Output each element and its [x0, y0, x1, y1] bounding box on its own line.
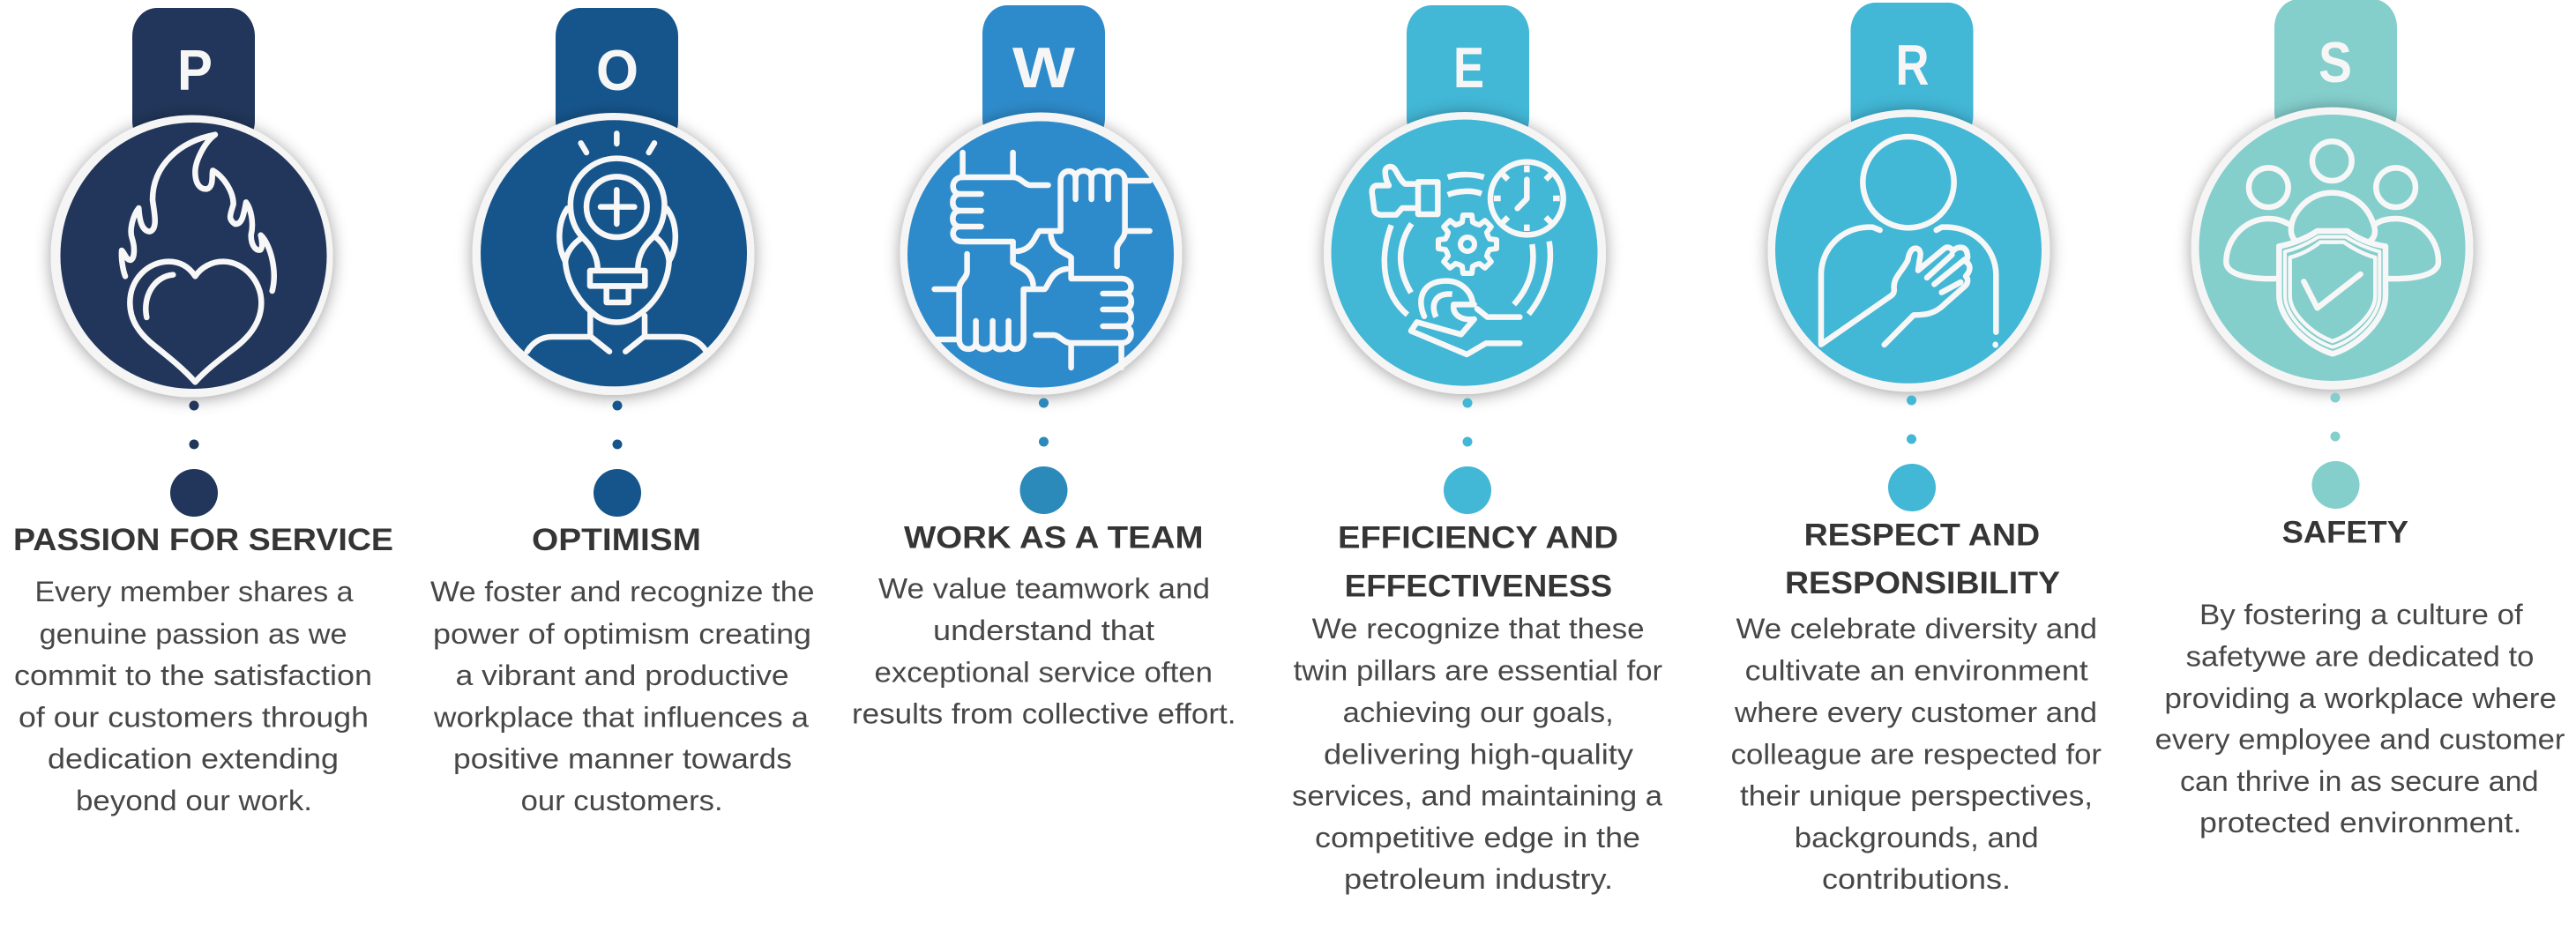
tab: letter O: O — [596, 38, 638, 102]
text: optimism description — [430, 576, 815, 816]
tab: letter R: R — [1896, 33, 1930, 97]
text: respect description: We celebrate diversity and — [1736, 613, 2097, 645]
text: optimism description: a vibrant and productive — [456, 660, 789, 691]
text: optimism description: We foster and recognize the — [430, 576, 815, 607]
icon: person with hand on heart — [1821, 137, 1996, 345]
tab: letter S — [2274, 0, 2397, 140]
badge circle E — [1324, 112, 1606, 394]
heading: optimism: OPTIMISM — [532, 523, 701, 557]
badge circle O — [473, 113, 755, 395]
text: teamwork description: understand that — [933, 615, 1154, 646]
tab: letter E — [1407, 5, 1529, 146]
text: passion description: of our customers through — [19, 702, 369, 734]
text: efficiency description: twin pillars are essential for — [1294, 654, 1662, 686]
icon: gear — [1438, 215, 1497, 273]
text: optimism description: positive manner towards — [453, 742, 792, 774]
heading: passion for service: PASSION FOR SERVICE — [13, 523, 393, 557]
panel: E efficiency and effectiveness — [1292, 5, 1662, 895]
heading: respect and responsibility: RESPECT AND — [1804, 518, 2040, 552]
hand 2 — [1018, 171, 1150, 266]
tab: letter S: S — [2318, 30, 2352, 94]
text: respect description: cultivate an environment — [1745, 654, 2088, 686]
text: efficiency description: competitive edge in the — [1315, 822, 1640, 853]
text: optimism description: our customers. — [521, 785, 723, 816]
text: passion description: commit to the satisfaction — [14, 660, 372, 691]
heading: respect and responsibility — [1785, 518, 2060, 600]
heading: efficiency and effectiveness: EFFECTIVENESS — [1345, 570, 1612, 603]
text: respect description: colleague are respected for — [1731, 739, 2102, 771]
icon: head with light bulb — [527, 133, 706, 352]
connector dots P — [170, 400, 218, 517]
text: safety description — [2155, 599, 2565, 838]
heading: respect and responsibility: RESPONSIBILITY — [1785, 566, 2060, 600]
text: safety description: safetywe are dedicated to — [2186, 640, 2534, 672]
connector dots E — [1444, 399, 1491, 514]
text: passion description: Every member shares a — [35, 576, 354, 607]
panel: R respect and responsibility — [1731, 3, 2102, 895]
text: teamwork description: exceptional service often — [875, 656, 1213, 688]
tab: letter P: P — [177, 38, 213, 102]
text: respect description: contributions. — [1822, 863, 2011, 895]
connector dots R — [1888, 395, 1936, 511]
icon: flaming heart — [122, 135, 274, 382]
panel: O optimism — [430, 8, 815, 816]
text: passion description: beyond our work. — [76, 785, 312, 816]
panel: P passion for service — [13, 8, 393, 816]
hand 3 — [1036, 235, 1131, 368]
tab: letter P — [132, 8, 255, 149]
tab: letter O — [556, 8, 678, 149]
text: efficiency description: services, and maintaining a — [1292, 779, 1662, 811]
heading: efficiency and effectiveness: EFFICIENCY AND — [1338, 520, 1618, 555]
text: passion description — [14, 576, 372, 816]
tab: letter W: W — [1012, 35, 1076, 100]
heading: safety: SAFETY — [2282, 515, 2408, 550]
tab: letter E: E — [1453, 35, 1484, 100]
text: passion description: genuine passion as we — [40, 618, 347, 650]
text: efficiency description: petroleum industry. — [1344, 863, 1613, 895]
panel: S safety — [2155, 0, 2565, 838]
text: respect description: backgrounds, and — [1795, 822, 2039, 853]
badge circle S — [2191, 108, 2473, 390]
connector dots S — [2312, 393, 2360, 509]
text: efficiency description — [1292, 613, 1662, 895]
badge circle P — [51, 115, 333, 397]
text: safety description: protected environment. — [2199, 807, 2521, 838]
tab: letter R — [1850, 3, 1974, 144]
text: teamwork description: We value teamwork and — [878, 573, 1210, 605]
icon: people with shield check — [2226, 141, 2438, 354]
icon: thumbs up, clock, hand with coin — [1372, 162, 1564, 354]
text: safety description: By fostering a culture of — [2199, 599, 2523, 630]
connector dots O — [594, 400, 641, 517]
panel: W work as a team — [852, 5, 1236, 730]
text: passion description: dedication extending — [48, 742, 339, 774]
text: optimism description: workplace that influences a — [433, 702, 809, 734]
tab: letter W — [982, 5, 1105, 146]
badge circle R — [1767, 109, 2050, 391]
text: efficiency description: We recognize that these — [1312, 613, 1645, 645]
heading: work as a team: WORK AS A TEAM — [904, 520, 1203, 555]
hand 1 — [952, 153, 1049, 285]
text: optimism description: power of optimism creating — [433, 618, 811, 650]
text: respect description: where every customer and — [1734, 697, 2097, 728]
icon: four interlocked hands — [935, 153, 1150, 368]
text: respect description — [1731, 613, 2102, 895]
text: teamwork description — [852, 573, 1236, 730]
text: safety description: providing a workplace where — [2164, 682, 2557, 714]
text: teamwork description: results from collective effort. — [852, 698, 1236, 730]
text: respect description: their unique perspectives, — [1740, 779, 2093, 811]
heading: efficiency and effectiveness — [1338, 520, 1618, 603]
text: safety description: every employee and customer — [2155, 724, 2565, 756]
connector dots W — [1019, 399, 1067, 514]
hand 4 — [935, 254, 1067, 349]
text: efficiency description: achieving our goals, — [1343, 697, 1614, 728]
text: efficiency description: delivering high-quality — [1324, 739, 1633, 771]
badge circle W — [900, 113, 1182, 395]
text: safety description: can thrive in as secure and — [2180, 765, 2538, 797]
